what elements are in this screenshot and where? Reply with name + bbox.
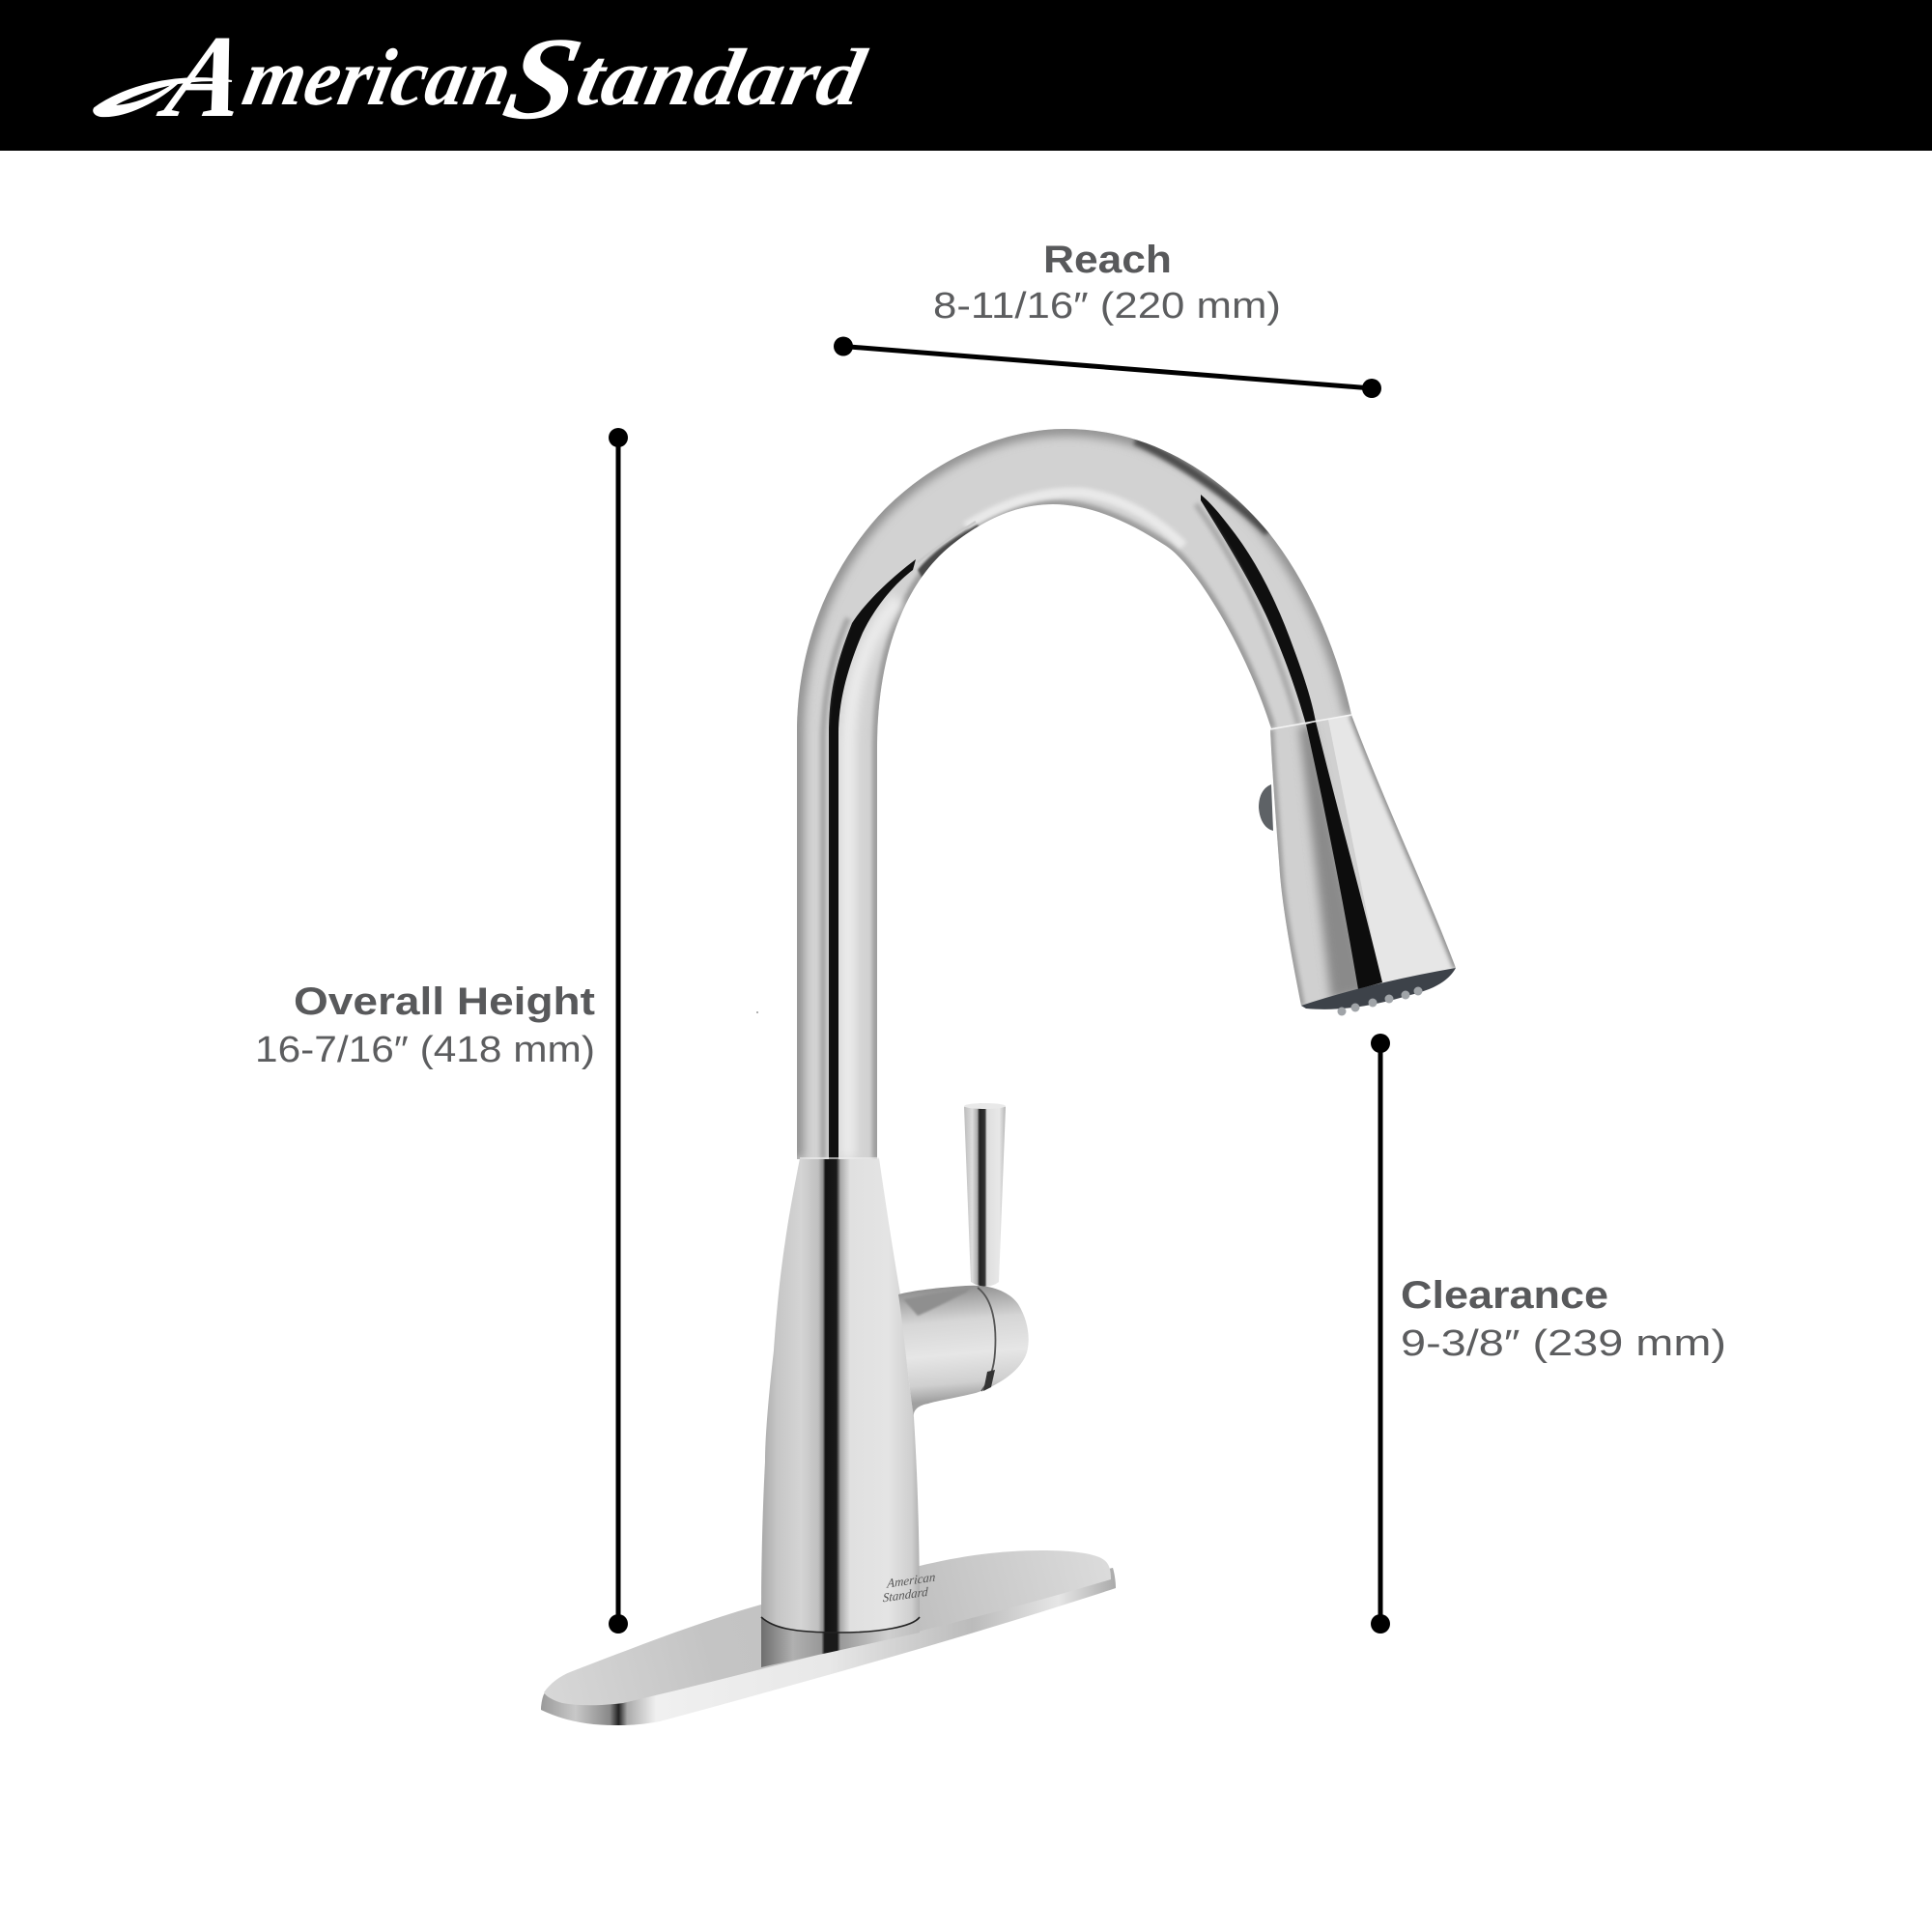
logo text American: A [150,11,260,142]
spray face [1301,968,1456,1009]
underside bright band [966,493,1183,546]
logo swash on the capital A [94,78,232,116]
clearance label: Clearance [1401,1274,1608,1317]
head collar seam [1270,715,1351,729]
clearance line [1378,1043,1383,1624]
brand logo wordmark [94,11,878,144]
reach start dot [834,336,853,355]
engraved word American: American [886,1570,936,1591]
height label: Overall Height [294,980,595,1023]
hub neck reflection [903,1288,971,1316]
engraved word Standard: Standard [883,1584,928,1605]
underside shadow at left bend [917,524,980,578]
upper arc darker top [1135,440,1268,532]
reach value: 8-11/16″ (220 mm) [933,286,1281,327]
spray nozzles [1337,987,1422,1016]
spout gooseneck [797,429,1351,1159]
head right bright facet [1328,715,1456,985]
head left edge shade [1270,729,1301,1006]
left dark reflection stripe [829,559,916,1159]
deck plate top surface [544,1550,1111,1705]
height top dot [609,428,628,447]
dimension: reach [834,239,1381,398]
reach end dot [1362,379,1381,398]
lever hub [898,1286,1029,1417]
handle cap [964,1103,1006,1109]
spray head [1259,715,1456,1016]
height value: 16-7/16″ (418 mm) [255,1030,595,1070]
header band with brand logo [0,0,1932,151]
faucet illustration [541,429,1456,1725]
logo text Standard: S [494,13,593,144]
reach line [843,346,1372,388]
faucet reflection on plate [761,1617,920,1667]
hub dark highlight [983,1370,995,1391]
deck plate rim [541,1568,1116,1725]
left stripe soft shoulder [823,618,848,1159]
faucet base body [761,1158,936,1633]
bend reflection squiggle [918,522,976,562]
collar seam [800,1157,879,1159]
right stripe soft shoulder [1196,504,1298,724]
deck plate [541,1550,1116,1725]
head dark stripe [1306,722,1382,989]
base shadow ring [761,1617,920,1633]
clearance top dot [1371,1034,1390,1053]
height bottom dot [609,1614,628,1634]
right dark reflection stripe [1201,495,1316,724]
lever handle [964,1103,1006,1287]
head right edge shade [1351,715,1456,968]
head stripe soft shoulder [1299,724,1367,1001]
clearance bottom dot [1371,1614,1390,1634]
logo text American: merican [236,33,520,123]
bright band beside left stripe [848,599,898,1159]
logo text Standard: tandard [570,33,873,123]
reach label: Reach [1043,239,1172,281]
dimension: overall height [255,428,628,1634]
outer edge shading [797,429,1351,1159]
trigger button [1259,784,1273,831]
clearance value: 9-3/8″ (239 mm) [1401,1323,1726,1364]
hub groove [978,1288,995,1391]
height line [616,438,620,1624]
head shell [1270,715,1456,1006]
dimension: clearance [1371,1034,1726,1634]
inner edge shading [877,504,1271,1159]
small engraved brand mark [883,1570,936,1605]
